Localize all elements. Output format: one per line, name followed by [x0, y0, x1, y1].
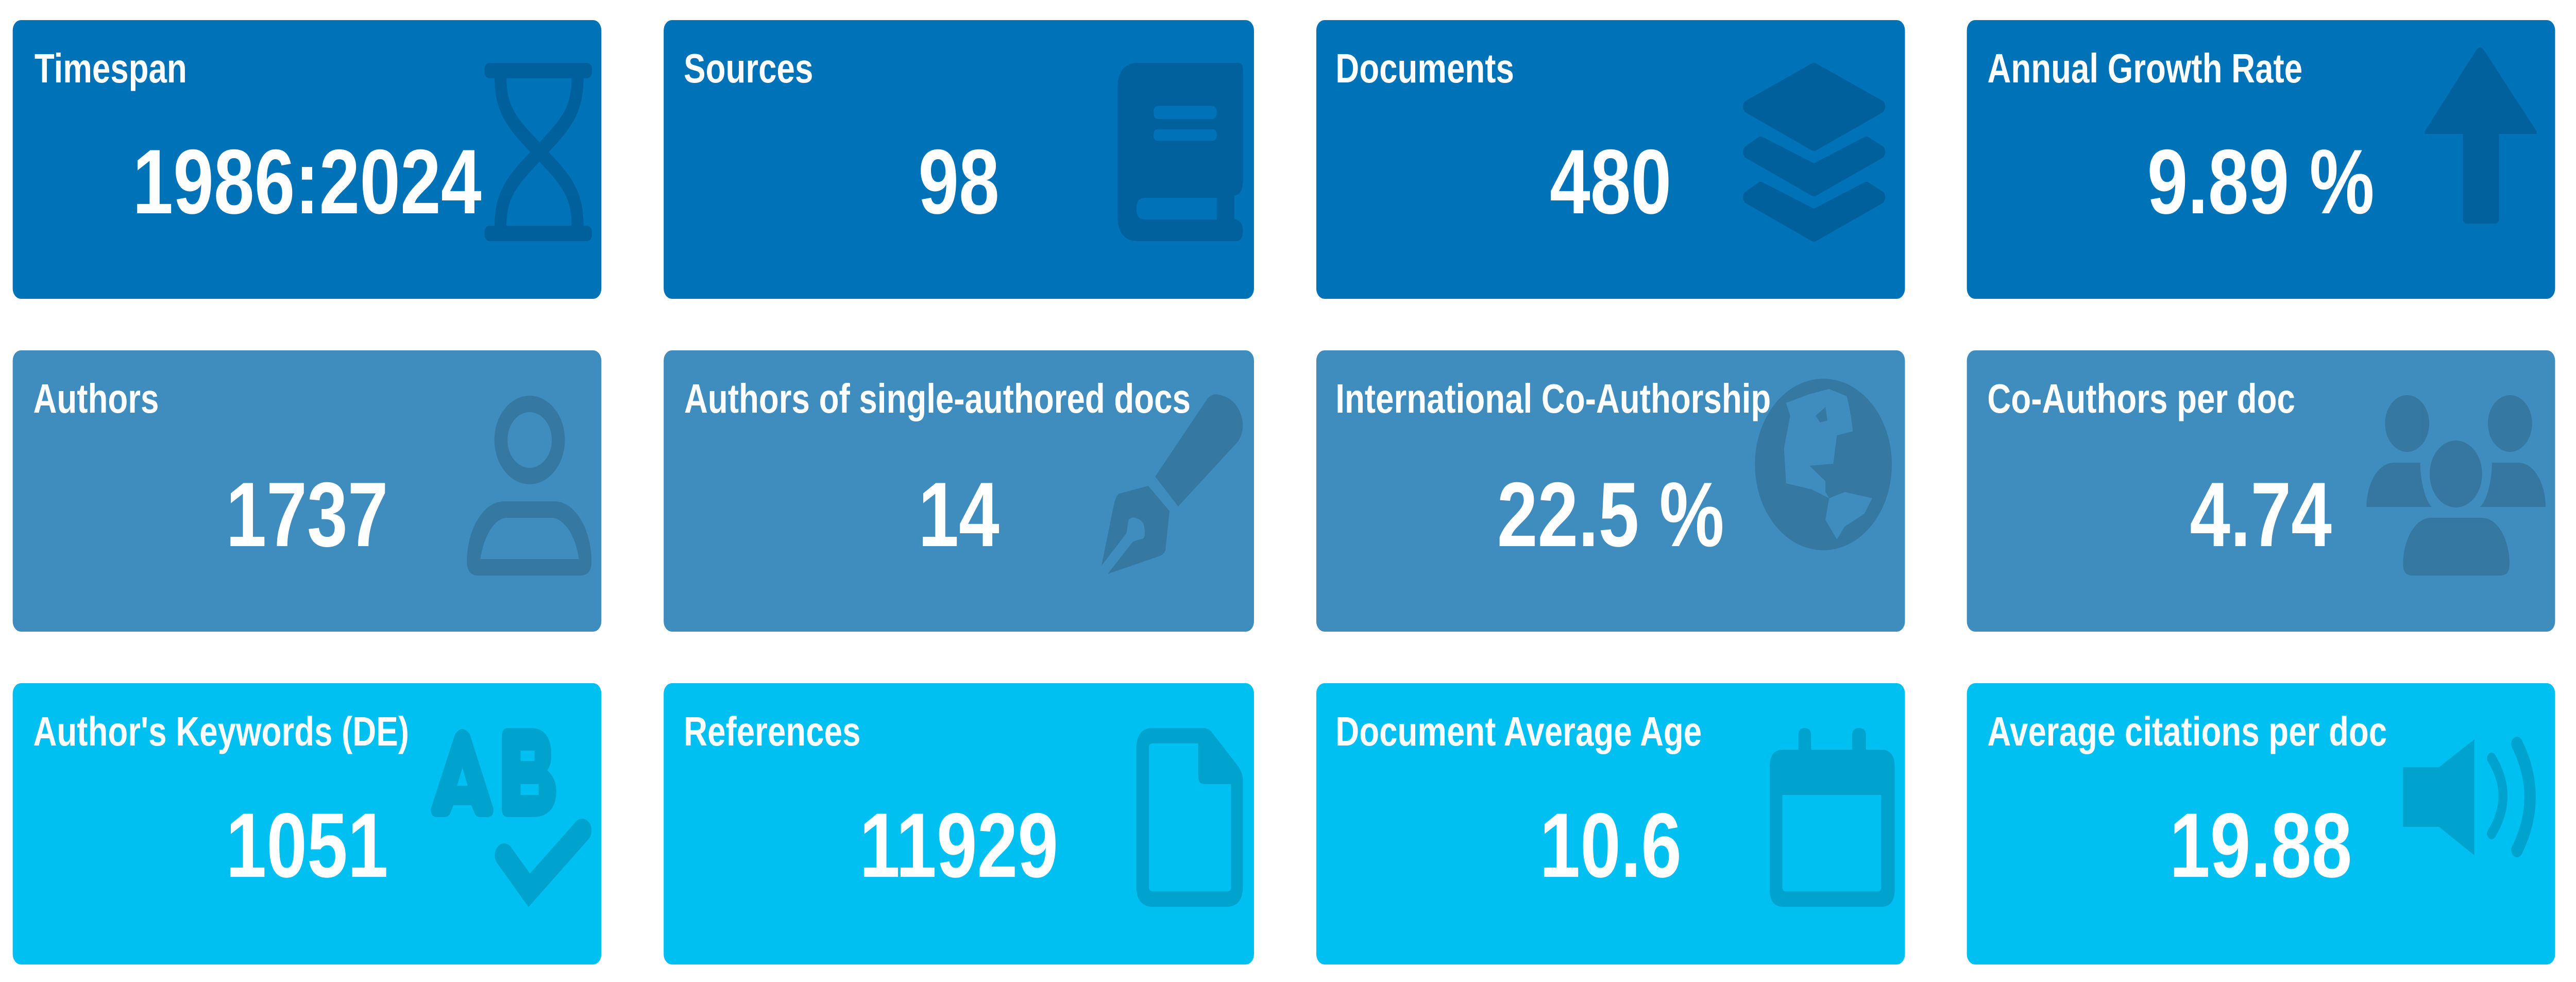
panel: Authors of single-authored docs: [664, 350, 1254, 632]
label: International Co-Authorship: International Co-Authorship: [1335, 376, 1771, 422]
label: Co-Authors per doc: Co-Authors per doc: [1987, 376, 2295, 422]
panel: Authors: [13, 350, 601, 632]
value: 9.89 %: 9.89 %: [2147, 131, 2375, 233]
label: Authors of single-authored docs: Authors of single-authored docs: [684, 376, 1191, 422]
icon: user outline: [467, 404, 591, 575]
icon: document page: [1137, 728, 1243, 907]
panel: Timespan: [13, 20, 601, 299]
icon: group of people: [2366, 395, 2546, 575]
value: 11929: 11929: [859, 794, 1058, 897]
card background: International Co-Authorship: [1316, 350, 1905, 632]
icon: fountain pen: [1101, 394, 1243, 574]
icon: calendar: [1770, 728, 1895, 907]
value: 1986:2024: 1986:2024: [132, 131, 482, 233]
icon: speaker: [2403, 739, 2530, 855]
panel: Annual Growth Rate: [1967, 20, 2555, 299]
card background: Average citations per doc: [1967, 683, 2555, 964]
label: References: References: [684, 709, 860, 755]
card background: Author's Keywords (DE): [13, 683, 601, 964]
value: 19.88: 19.88: [2170, 794, 2352, 897]
panel: International Co-Authorship: [1316, 350, 1905, 632]
label: Author's Keywords (DE): Author's Keywords (DE): [33, 709, 409, 755]
value: 98: 98: [918, 131, 999, 233]
card background: Annual Growth Rate: [1967, 20, 2555, 299]
value: 14: 14: [918, 464, 999, 566]
panel: Author's Keywords (DE): [13, 683, 601, 964]
icon: stacked layers: [1749, 70, 1880, 235]
card background: Sources: [664, 20, 1254, 299]
panel: Sources: [664, 20, 1254, 299]
label: Sources: Sources: [684, 46, 813, 92]
panel: References: [664, 683, 1254, 964]
panel: Average citations per doc: [1967, 683, 2555, 964]
card background: References: [664, 683, 1254, 964]
card background: Timespan: [13, 20, 601, 299]
card background: Documents: [1316, 20, 1905, 299]
card background: Authors of single-authored docs: [664, 350, 1254, 632]
label: Authors: Authors: [33, 376, 159, 422]
label: Documents: Documents: [1335, 46, 1514, 92]
label: Annual Growth Rate: Annual Growth Rate: [1987, 46, 2302, 92]
card background: Document Average Age: [1316, 683, 1905, 964]
value: 1737: 1737: [226, 464, 388, 566]
panel: Co-Authors per doc: [1967, 350, 2555, 632]
icon: AB with check mark: [431, 728, 582, 890]
panel: Document Average Age: [1316, 683, 1905, 964]
value: 480: 480: [1550, 131, 1671, 233]
icon: hourglass: [484, 63, 592, 241]
icon: globe: [1755, 379, 1892, 550]
card background: Authors: [13, 350, 601, 632]
value: 22.5 %: 22.5 %: [1497, 464, 1724, 566]
icon: book: [1117, 63, 1243, 241]
icon: up arrow: [2425, 47, 2537, 224]
label: Average citations per doc: Average citations per doc: [1987, 709, 2387, 755]
value: 1051: 1051: [226, 794, 388, 897]
value: 10.6: 10.6: [1539, 794, 1682, 897]
label: Document Average Age: Document Average Age: [1335, 709, 1702, 755]
label: Timespan: Timespan: [35, 46, 187, 92]
panel: Documents: [1316, 20, 1905, 299]
value: 4.74: 4.74: [2190, 464, 2332, 566]
card background: Co-Authors per doc: [1967, 350, 2555, 632]
